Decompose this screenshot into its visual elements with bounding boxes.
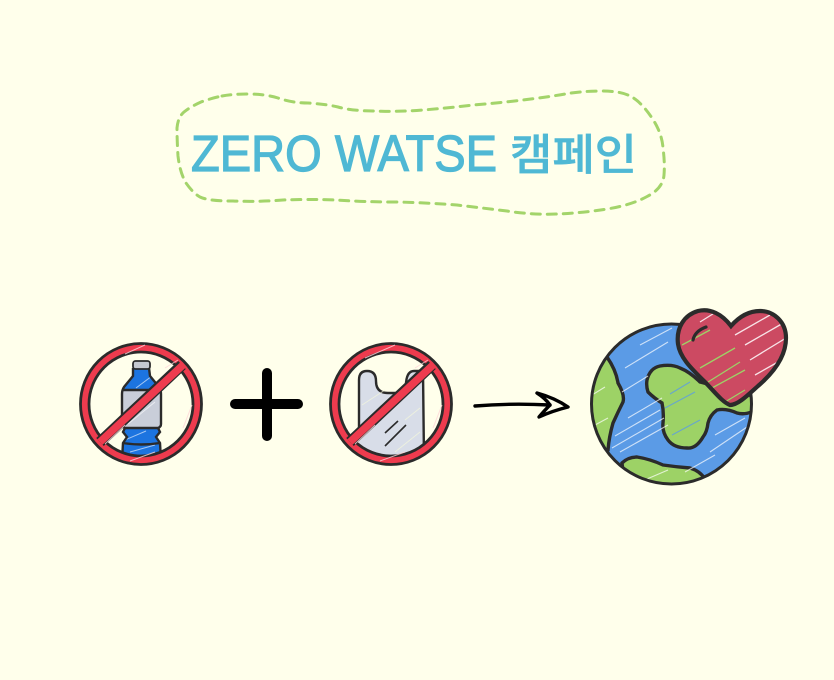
bottle [122, 361, 162, 460]
arrow [475, 393, 568, 417]
prohibition ring [330, 344, 452, 464]
icon: no plastic bottle [80, 344, 202, 464]
heart [678, 310, 786, 405]
icon: earth with heart [585, 310, 786, 495]
prohibition ring [80, 344, 202, 464]
heart highlight [693, 327, 706, 340]
center continent [647, 365, 760, 448]
bottom continent [620, 455, 704, 482]
icon: no plastic bag [330, 344, 452, 464]
title text: ZERO WATSE [191, 125, 497, 182]
left continent [593, 356, 626, 452]
title: dashed blob badge [177, 91, 664, 214]
bottle cap [133, 361, 150, 369]
earth globe [590, 322, 753, 486]
infographic canvas [79, 90, 788, 486]
plus sign [235, 373, 298, 436]
plastic bag [359, 371, 424, 460]
dashed blob outline [177, 91, 664, 214]
title text: 캠페인 [510, 132, 637, 180]
